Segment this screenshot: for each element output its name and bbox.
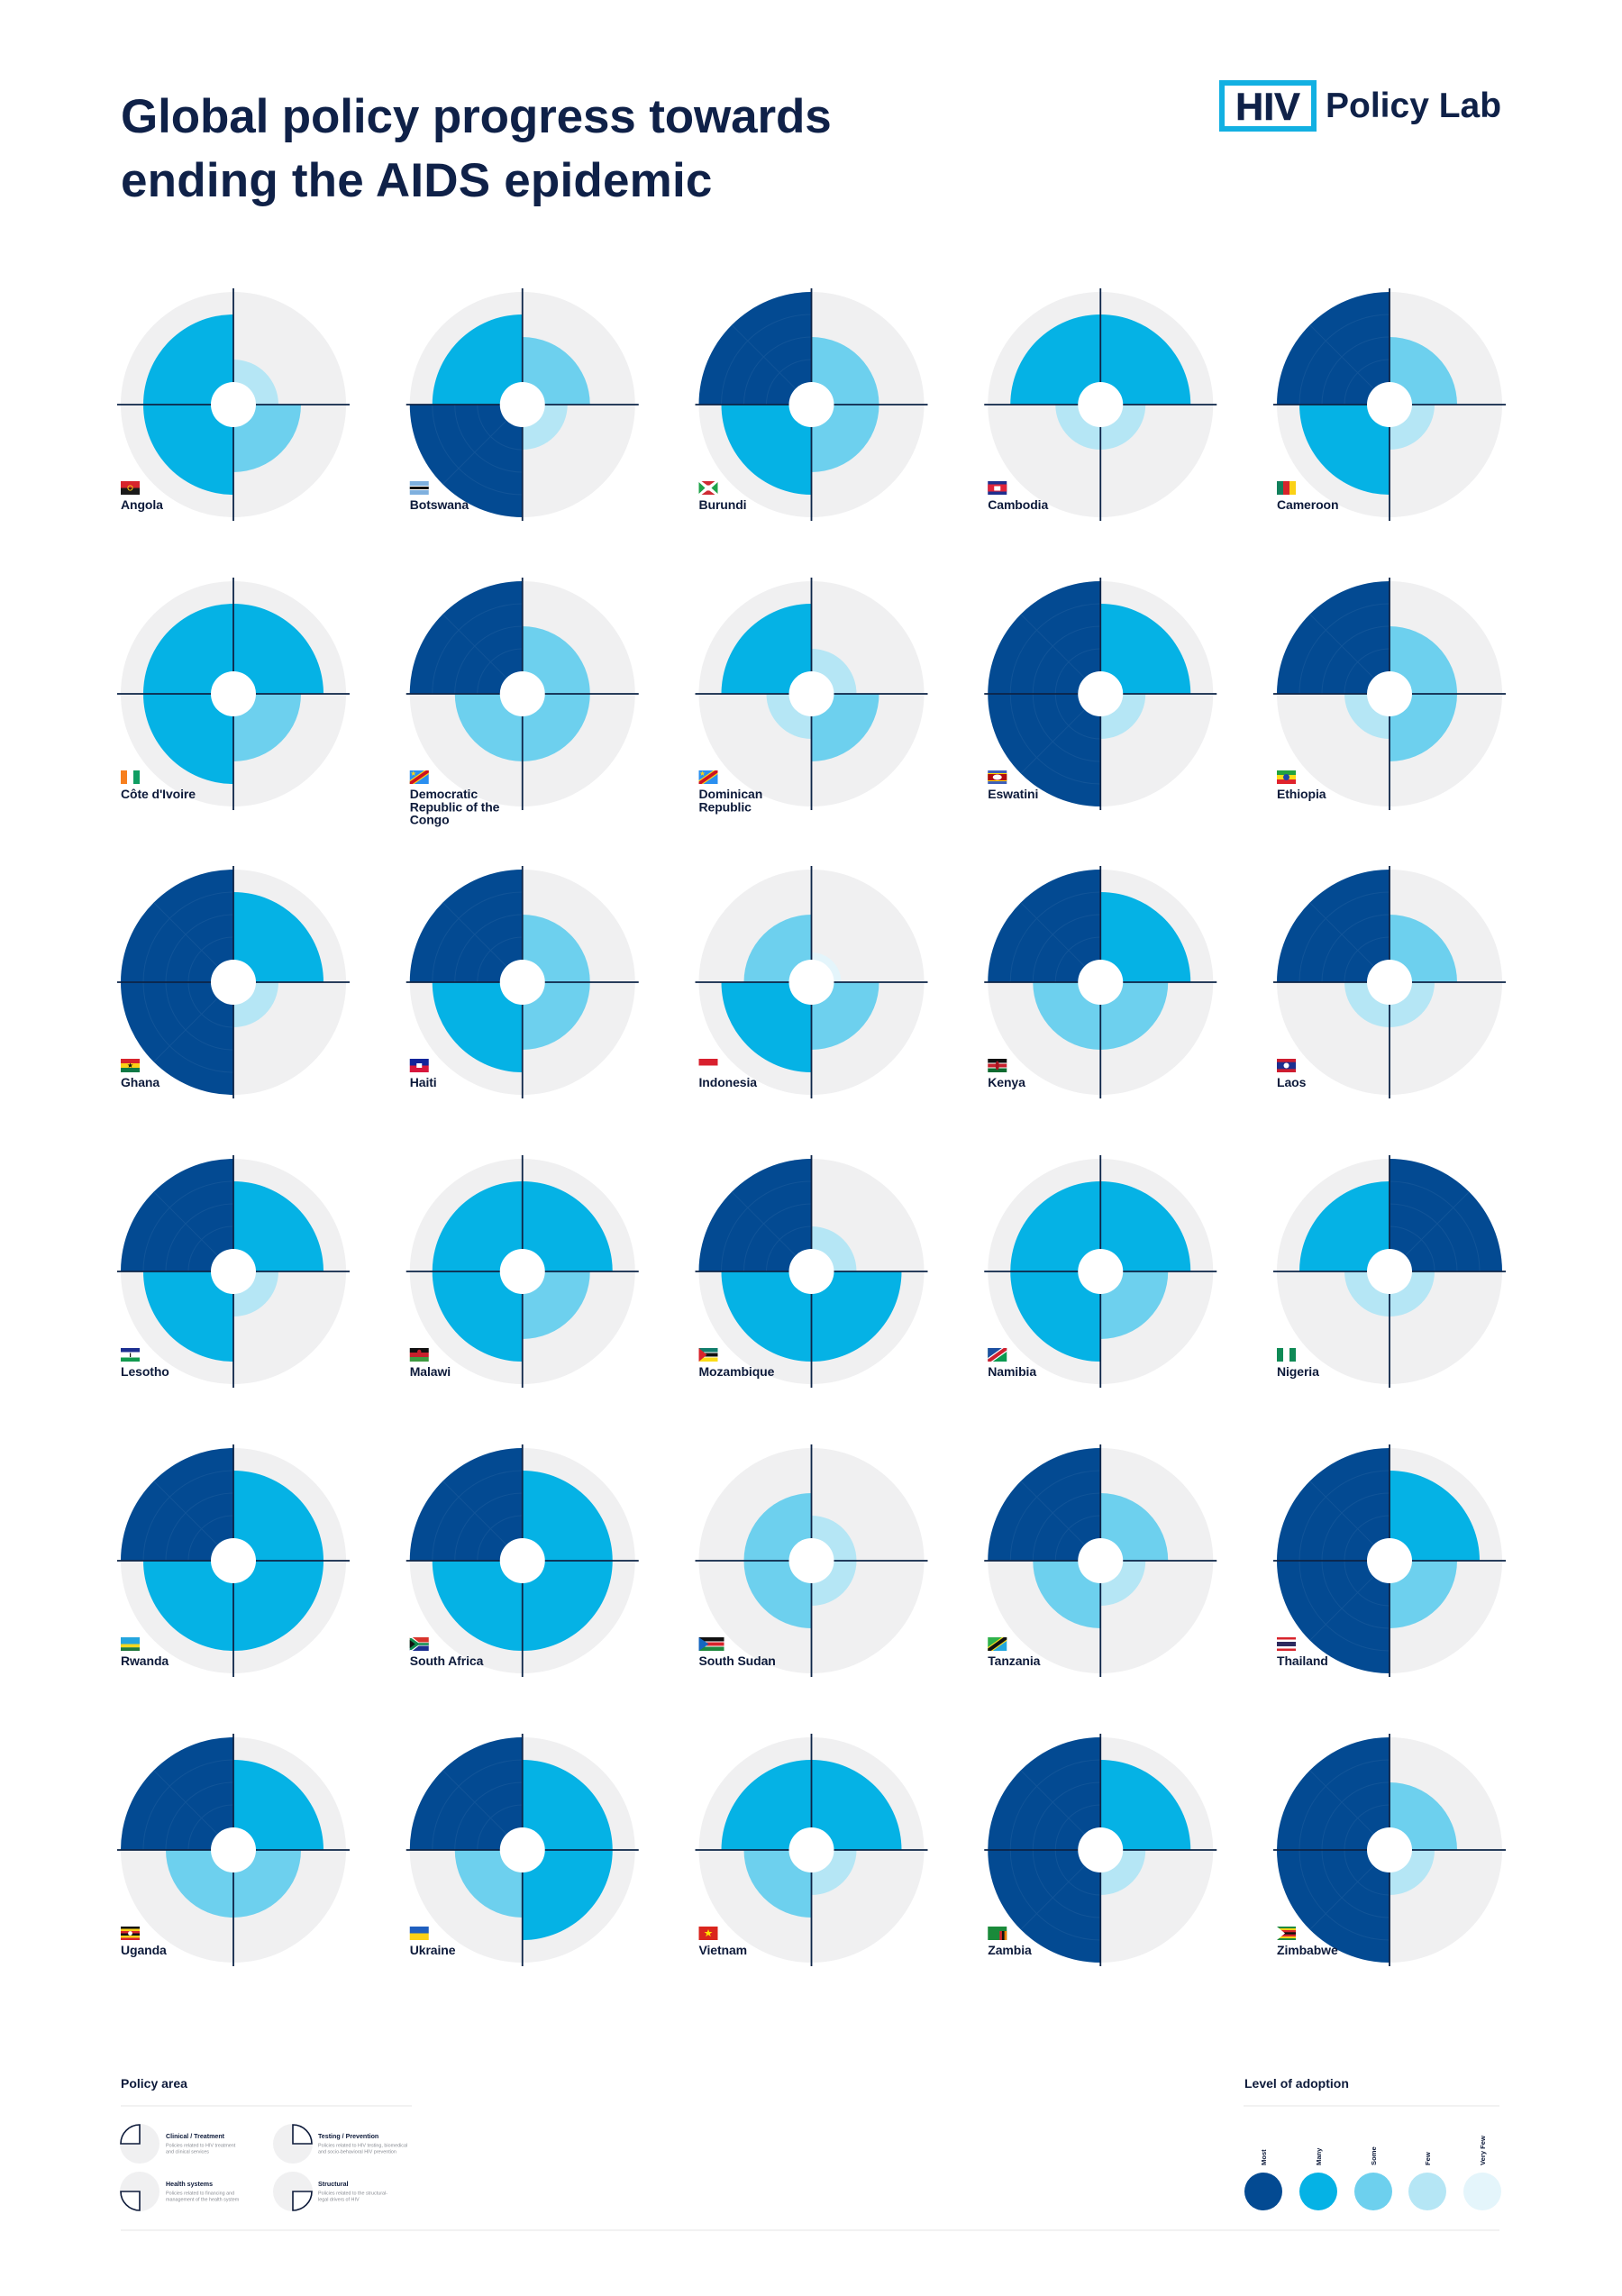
logo: HIV Policy Lab: HIV [1235, 86, 1300, 129]
chart: South Sudan [696, 1444, 928, 1677]
label: Vietnam: Vietnam [699, 1943, 747, 1957]
chart: South Africa [406, 1444, 639, 1677]
label: South Africa: South Africa [410, 1654, 484, 1668]
flag: Nigeria [1277, 1348, 1296, 1362]
chart: Zambia [984, 1734, 1216, 1966]
legend item: health systems [120, 2172, 240, 2211]
legend item: structural [273, 2172, 387, 2211]
legend item: clinical / treatment: and clinical services [166, 2150, 209, 2155]
chart: Côte d'Ivoire [117, 578, 350, 810]
label: Cambodia: Cambodia [988, 497, 1048, 512]
flag: Namibia [988, 1348, 1007, 1362]
chart: Namibia [984, 1155, 1216, 1388]
chart: Ethiopia [1273, 578, 1506, 810]
chart: Ghana [117, 866, 350, 1098]
legend item: health systems: Policies related to financing and [166, 2191, 234, 2197]
label: Laos: Laos [1277, 1075, 1307, 1089]
label: Cameroon: Cameroon [1277, 497, 1338, 512]
label: Namibia: Namibia [988, 1364, 1036, 1379]
label: Malawi: Malawi [410, 1364, 451, 1379]
legend item: testing / prevention [273, 2124, 407, 2164]
label: Democratic Republic of the Congo: Republic of the [410, 799, 500, 814]
title [121, 90, 832, 207]
chart: Rwanda [117, 1444, 350, 1677]
label: Côte d'Ivoire: Côte d'Ivoire [121, 787, 196, 801]
legend heading: level of adoption: Level of adoption [1244, 2076, 1349, 2091]
flag: South Africa [410, 1637, 429, 1651]
label: Ukraine: Ukraine [410, 1943, 456, 1957]
legend item: clinical / treatment: Policies related to HIV treatment [166, 2143, 236, 2148]
label: Democratic Republic of the Congo: Democratic [410, 787, 478, 801]
chart: Eswatini [984, 578, 1216, 810]
chart: Indonesia [696, 866, 928, 1098]
adoption swatch: few: Few [1424, 2152, 1432, 2165]
flag: Botswana [410, 481, 429, 495]
legend item: structural: legal drivers of HIV [318, 2197, 360, 2202]
flag: Zambia [988, 1927, 1007, 1940]
label: Zambia: Zambia [988, 1943, 1032, 1957]
flag: Laos [1277, 1059, 1296, 1072]
label: Nigeria: Nigeria [1277, 1364, 1319, 1379]
title: Global policy progress towards [121, 90, 832, 143]
legend item: clinical / treatment [120, 2124, 236, 2164]
label: Mozambique: Mozambique [699, 1364, 775, 1379]
flag: Dominican Republic [699, 770, 717, 784]
flag: Uganda [121, 1927, 140, 1940]
label: Indonesia: Indonesia [699, 1075, 757, 1089]
legend item: testing / prevention: Policies related to HIV testing, biomedical [318, 2143, 407, 2148]
adoption swatch: many [1299, 2147, 1337, 2210]
adoption swatch: very few [1463, 2136, 1501, 2210]
flag: Ukraine [410, 1927, 429, 1940]
label: Zimbabwe: Zimbabwe [1277, 1943, 1338, 1957]
flag: Kenya [988, 1059, 1007, 1072]
legend: level of adoption [1244, 2076, 1501, 2210]
label: Dominican Republic: Dominican [699, 787, 762, 801]
chart: Democratic Republic of the Congo [406, 578, 639, 827]
chart: Dominican Republic [696, 578, 928, 814]
label: Haiti: Haiti [410, 1075, 437, 1089]
title: ending the AIDS epidemic [121, 154, 713, 207]
label: Botswana: Botswana [410, 497, 469, 512]
flag: Eswatini [988, 770, 1007, 784]
flag: Vietnam [699, 1927, 717, 1940]
adoption swatch: some: Some [1370, 2146, 1378, 2165]
label: Angola: Angola [121, 497, 163, 512]
adoption swatch: most: Most [1260, 2149, 1268, 2165]
adoption swatch: some [1354, 2146, 1392, 2210]
flag: Zimbabwe [1277, 1927, 1296, 1940]
flag: Cambodia [988, 481, 1007, 495]
adoption swatch: very few: Very Few [1479, 2136, 1487, 2165]
label: Tanzania: Tanzania [988, 1654, 1041, 1668]
chart: Nigeria [1273, 1155, 1506, 1388]
label: Ethiopia: Ethiopia [1277, 787, 1326, 801]
chart: Angola [117, 288, 350, 521]
chart: Ukraine [406, 1734, 639, 1966]
chart: Burundi [696, 288, 928, 521]
legend item: clinical / treatment: Clinical / Treatment [166, 2133, 225, 2140]
label: Eswatini: Eswatini [988, 787, 1038, 801]
chart: Thailand [1273, 1444, 1506, 1677]
flag: South Sudan [699, 1637, 724, 1651]
flag: Thailand [1277, 1637, 1296, 1651]
flag: Rwanda [121, 1637, 140, 1651]
chart: Zimbabwe [1273, 1734, 1506, 1966]
chart: Haiti [406, 866, 639, 1098]
flag: Indonesia [699, 1059, 717, 1072]
legend item: testing / prevention: Testing / Prevention [318, 2133, 378, 2140]
flag: Cameroon [1277, 481, 1296, 495]
label: Thailand: Thailand [1277, 1654, 1328, 1668]
label: South Sudan: South Sudan [699, 1654, 776, 1668]
chart: Cameroon [1273, 288, 1506, 521]
label: Burundi: Burundi [699, 497, 746, 512]
chart: Uganda [117, 1734, 350, 1966]
chart: Botswana [406, 288, 639, 521]
chart: Cambodia [984, 288, 1216, 521]
flag: Mozambique [699, 1348, 717, 1362]
flag: Angola [121, 481, 140, 495]
logo: HIV Policy Lab [1222, 83, 1501, 129]
chart: Kenya [984, 866, 1216, 1098]
chart: Malawi [406, 1155, 639, 1388]
label: Kenya: Kenya [988, 1075, 1025, 1089]
adoption swatch: most [1244, 2149, 1282, 2210]
flag: Ethiopia [1277, 770, 1296, 784]
flag: Haiti [410, 1059, 429, 1072]
legend item: structural: Policies related to the structural- [318, 2191, 387, 2197]
label: Ghana: Ghana [121, 1075, 159, 1089]
label: Dominican Republic: Republic [699, 799, 752, 814]
legend: policy area [120, 2076, 412, 2211]
chart: Tanzania [984, 1444, 1216, 1677]
label: Rwanda: Rwanda [121, 1654, 169, 1668]
adoption swatch: few [1408, 2152, 1446, 2210]
flag: Burundi [699, 481, 717, 495]
label: Uganda: Uganda [121, 1943, 167, 1957]
chart: Vietnam [696, 1734, 928, 1966]
legend item: testing / prevention: and socio-behavioral HIV prevention [318, 2150, 396, 2155]
logo: HIV Policy Lab: Policy Lab [1326, 87, 1501, 125]
legend heading: policy area: Policy area [121, 2076, 187, 2091]
legend item: health systems: management of the health system [166, 2197, 240, 2202]
chart: Lesotho [117, 1155, 350, 1388]
label: Lesotho: Lesotho [121, 1364, 169, 1379]
flag: Malawi [410, 1348, 429, 1362]
flag: Ghana [121, 1059, 140, 1072]
chart: Mozambique [696, 1155, 928, 1388]
flag: Côte d'Ivoire [121, 770, 140, 784]
label: Democratic Republic of the Congo: Congo [410, 813, 450, 827]
chart: Laos [1273, 866, 1506, 1098]
flag: Democratic Republic of the Congo [410, 770, 429, 784]
flag: Tanzania [988, 1637, 1007, 1651]
legend item: structural: Structural [318, 2181, 349, 2188]
flag: Lesotho [121, 1348, 140, 1362]
legend item: health systems: Health systems [166, 2181, 213, 2188]
adoption swatch: many: Many [1315, 2147, 1323, 2165]
